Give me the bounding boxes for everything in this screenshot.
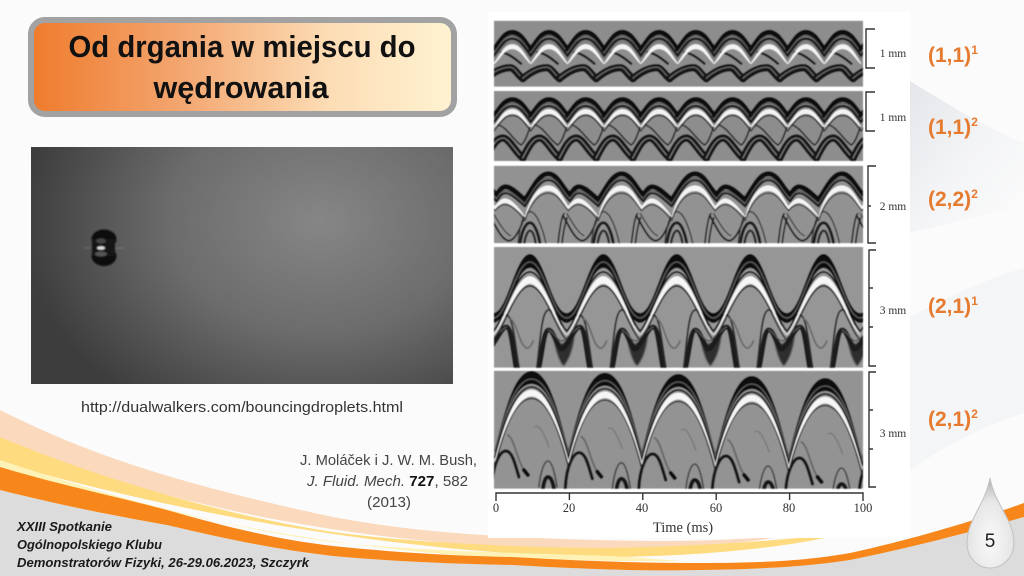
background swoosh lower right	[908, 268, 1024, 472]
bottom grey footer	[0, 490, 1024, 576]
mode labels: 1	[971, 294, 978, 308]
mode labels: 1	[971, 43, 978, 57]
citation: (2013)	[367, 494, 411, 511]
scale brackets and labels	[866, 29, 906, 487]
scale brackets and labels: 3 mm	[880, 305, 906, 317]
scale brackets and labels: 1 mm	[880, 112, 906, 124]
figure backing	[488, 12, 910, 538]
page number droplet	[967, 478, 1014, 568]
footer conference text	[16, 519, 310, 570]
mode labels: 2	[971, 115, 978, 129]
chart: spatio-temporal diagrams	[493, 20, 864, 490]
footer conference text: Ogólnopolskiego Klubu	[17, 537, 162, 552]
citation: J. Fluid. Mech. 727, 582	[306, 473, 468, 490]
title box: Od drgania w miejscu do	[68, 29, 416, 64]
time axis	[493, 493, 872, 536]
droplet	[84, 230, 124, 266]
citation	[300, 452, 477, 511]
time axis: 60	[710, 501, 722, 515]
mode labels: 2	[971, 407, 978, 421]
source URL: http://dualwalkers.com/bouncingdroplets.html	[81, 399, 403, 416]
panel 5	[493, 370, 864, 490]
footer conference text: XXIII Spotkanie	[16, 519, 112, 534]
time axis: 80	[783, 501, 795, 515]
panel 1	[493, 20, 864, 88]
mode labels: (2,2)	[928, 188, 971, 211]
mode labels	[928, 43, 978, 431]
scale brackets and labels: 2 mm	[880, 201, 906, 213]
mode labels: (2,1)	[928, 295, 971, 318]
bottom swoosh band: orange	[0, 467, 1024, 570]
panel 4	[493, 246, 864, 369]
title box: wędrowania	[153, 70, 329, 105]
time axis: 0	[493, 501, 499, 515]
background grey swoosh right	[908, 80, 1024, 233]
mode labels: 2	[971, 187, 978, 201]
time axis: 40	[636, 501, 648, 515]
mode labels: (2,1)	[928, 408, 971, 431]
bottom swoosh band: peach	[0, 410, 788, 549]
panel 3	[493, 165, 864, 244]
title box	[31, 20, 454, 114]
bottom swoosh band: pale yellow	[0, 460, 680, 561]
scale brackets and labels: 1 mm	[880, 48, 906, 60]
footer conference text: Demonstratorów Fizyki, 26-29.06.2023, Szczyrk	[17, 555, 310, 570]
time axis: 20	[563, 501, 575, 515]
panel 2	[493, 90, 864, 162]
mode labels: (1,1)	[928, 116, 971, 139]
time axis: 100	[854, 501, 872, 515]
scale brackets and labels: 3 mm	[880, 428, 906, 440]
time axis: Time (ms)	[653, 520, 713, 536]
page number droplet: 5	[985, 531, 995, 552]
bottom swoosh band: yellow	[0, 437, 849, 557]
photo: bouncing droplet	[31, 147, 453, 384]
mode labels: (1,1)	[928, 44, 971, 67]
citation: J. Moláček i J. W. M. Bush,	[300, 452, 477, 469]
